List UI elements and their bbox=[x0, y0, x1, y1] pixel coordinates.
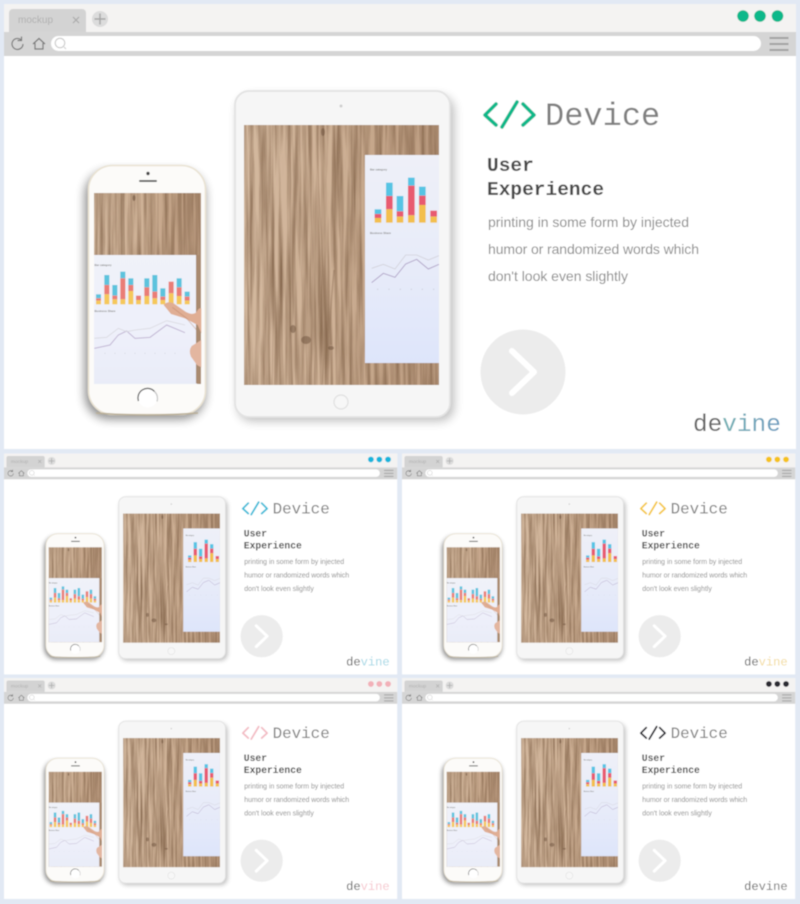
body text: humor or randomized words which bbox=[642, 797, 747, 804]
body text: humor or randomized words which bbox=[488, 241, 699, 257]
body text: printing in some form by injected bbox=[244, 784, 344, 791]
chart captions: Business Share bbox=[186, 566, 196, 569]
subheading: User Experience bbox=[244, 528, 302, 551]
chart captions: Bar category bbox=[49, 582, 58, 585]
heading: Device: Device bbox=[545, 98, 660, 135]
icon: code brackets bbox=[243, 502, 267, 515]
chart captions: Bar category bbox=[49, 806, 58, 809]
chart captions bbox=[447, 534, 594, 607]
chart captions bbox=[94, 168, 391, 313]
phone mockup bbox=[442, 758, 502, 884]
chart captions: Business Share bbox=[584, 566, 594, 569]
chart captions: Business Share bbox=[49, 604, 59, 607]
chart captions: Business Share bbox=[447, 604, 457, 607]
body text bbox=[642, 559, 747, 593]
body text: don't look even slightly bbox=[488, 268, 628, 284]
logo: devine: devine bbox=[346, 655, 390, 669]
body text: humor or randomized words which bbox=[244, 573, 349, 580]
chart captions: Bar category bbox=[447, 582, 456, 585]
chart captions: Business Share bbox=[370, 231, 391, 235]
chart captions: Business Share bbox=[186, 790, 196, 793]
body text: printing in some form by injected bbox=[642, 559, 742, 566]
chart captions: Bar category bbox=[370, 168, 388, 172]
subheading: User Experience: Experience bbox=[642, 765, 700, 776]
panel: main slide, green bbox=[4, 4, 796, 449]
subheading: User Experience bbox=[487, 155, 604, 201]
body text bbox=[488, 214, 699, 284]
heading: Device: Device bbox=[671, 725, 728, 743]
panel: blue variant slide bbox=[4, 453, 397, 674]
body text: don't look even slightly bbox=[244, 586, 314, 593]
chart captions bbox=[447, 759, 594, 832]
chart captions: Bar category bbox=[447, 806, 456, 809]
icon: next arrow button bbox=[639, 615, 681, 657]
heading: Device: Device bbox=[671, 501, 728, 519]
tablet mockup bbox=[517, 497, 625, 661]
chart captions bbox=[49, 759, 196, 832]
browser tab label: mockup bbox=[18, 15, 53, 26]
browser tab label: mockup bbox=[409, 683, 427, 689]
body text: printing in some form by injected bbox=[244, 559, 344, 566]
window dots bbox=[737, 10, 783, 22]
icon: code brackets bbox=[485, 102, 534, 127]
body text: don't look even slightly bbox=[244, 811, 314, 818]
browser window chrome bbox=[402, 453, 795, 674]
browser tab label: mockup bbox=[11, 459, 29, 465]
chart captions: Bar category bbox=[186, 534, 194, 537]
heading: Device: Device bbox=[273, 725, 330, 743]
logo: devine: devine bbox=[744, 880, 788, 894]
browser window chrome bbox=[4, 4, 796, 449]
window dots bbox=[766, 457, 789, 462]
body text: printing in some form by injected bbox=[642, 784, 742, 791]
phone mockup bbox=[85, 166, 206, 419]
subheading: User Experience bbox=[244, 753, 302, 776]
body text: don't look even slightly bbox=[642, 811, 712, 818]
tablet mockup bbox=[119, 497, 227, 661]
body text bbox=[642, 784, 747, 818]
icon: next arrow button bbox=[241, 840, 283, 882]
subheading: User Experience: Experience bbox=[642, 540, 700, 551]
phone mockup bbox=[44, 534, 104, 660]
icon: code brackets bbox=[641, 727, 665, 739]
tablet mockup bbox=[517, 721, 625, 885]
phone mockup bbox=[44, 758, 104, 884]
browser window chrome bbox=[4, 678, 397, 899]
subheading: User Experience: Experience bbox=[244, 540, 302, 551]
subheading: User Experience bbox=[642, 528, 700, 551]
browser tab label: mockup bbox=[11, 683, 29, 689]
panel: black variant slide bbox=[402, 678, 795, 899]
subheading: User Experience: User bbox=[642, 753, 665, 764]
browser window chrome bbox=[4, 453, 397, 674]
subheading: User Experience: Experience bbox=[487, 179, 604, 201]
body text bbox=[244, 784, 349, 818]
subheading: User Experience: Experience bbox=[244, 765, 302, 776]
logo: devine: devine bbox=[693, 412, 781, 439]
subheading: User Experience: User bbox=[487, 155, 534, 177]
icon: next arrow button bbox=[241, 615, 283, 657]
logo: devine: devine bbox=[346, 880, 390, 894]
body text: humor or randomized words which bbox=[244, 797, 349, 804]
chart captions: Business Share bbox=[49, 829, 59, 832]
chart captions: Bar category bbox=[94, 263, 112, 267]
chart captions: Bar category bbox=[584, 759, 592, 762]
chart captions bbox=[49, 534, 196, 607]
phone mockup bbox=[442, 534, 502, 660]
heading: Device: Device bbox=[273, 501, 330, 519]
logo: devine: devine bbox=[744, 655, 788, 669]
window dots bbox=[368, 457, 391, 462]
chart captions: Business Share bbox=[584, 790, 594, 793]
body text: humor or randomized words which bbox=[642, 573, 747, 580]
subheading: User Experience: User bbox=[642, 528, 665, 539]
window dots bbox=[766, 681, 789, 687]
panel: pink variant slide bbox=[4, 678, 397, 899]
icon: next arrow button bbox=[480, 330, 566, 414]
browser window chrome bbox=[402, 678, 795, 899]
chart captions: Business Share bbox=[94, 309, 116, 313]
browser tab label: mockup bbox=[409, 459, 427, 465]
subheading: User Experience bbox=[642, 753, 700, 776]
icon: next arrow button bbox=[639, 840, 681, 882]
body text: don't look even slightly bbox=[642, 586, 712, 593]
subheading: User Experience: User bbox=[244, 528, 267, 539]
tablet mockup bbox=[119, 721, 227, 885]
subheading: User Experience: User bbox=[244, 753, 267, 764]
window dots bbox=[368, 681, 391, 687]
panel: yellow variant slide bbox=[402, 453, 795, 674]
chart captions: Business Share bbox=[447, 829, 457, 832]
tablet mockup bbox=[235, 91, 454, 421]
chart captions: Bar category bbox=[584, 534, 592, 537]
body text bbox=[244, 559, 349, 593]
chart captions: Bar category bbox=[186, 759, 194, 762]
icon: code brackets bbox=[641, 502, 665, 515]
body text: printing in some form by injected bbox=[488, 214, 689, 230]
icon: code brackets bbox=[243, 727, 267, 739]
